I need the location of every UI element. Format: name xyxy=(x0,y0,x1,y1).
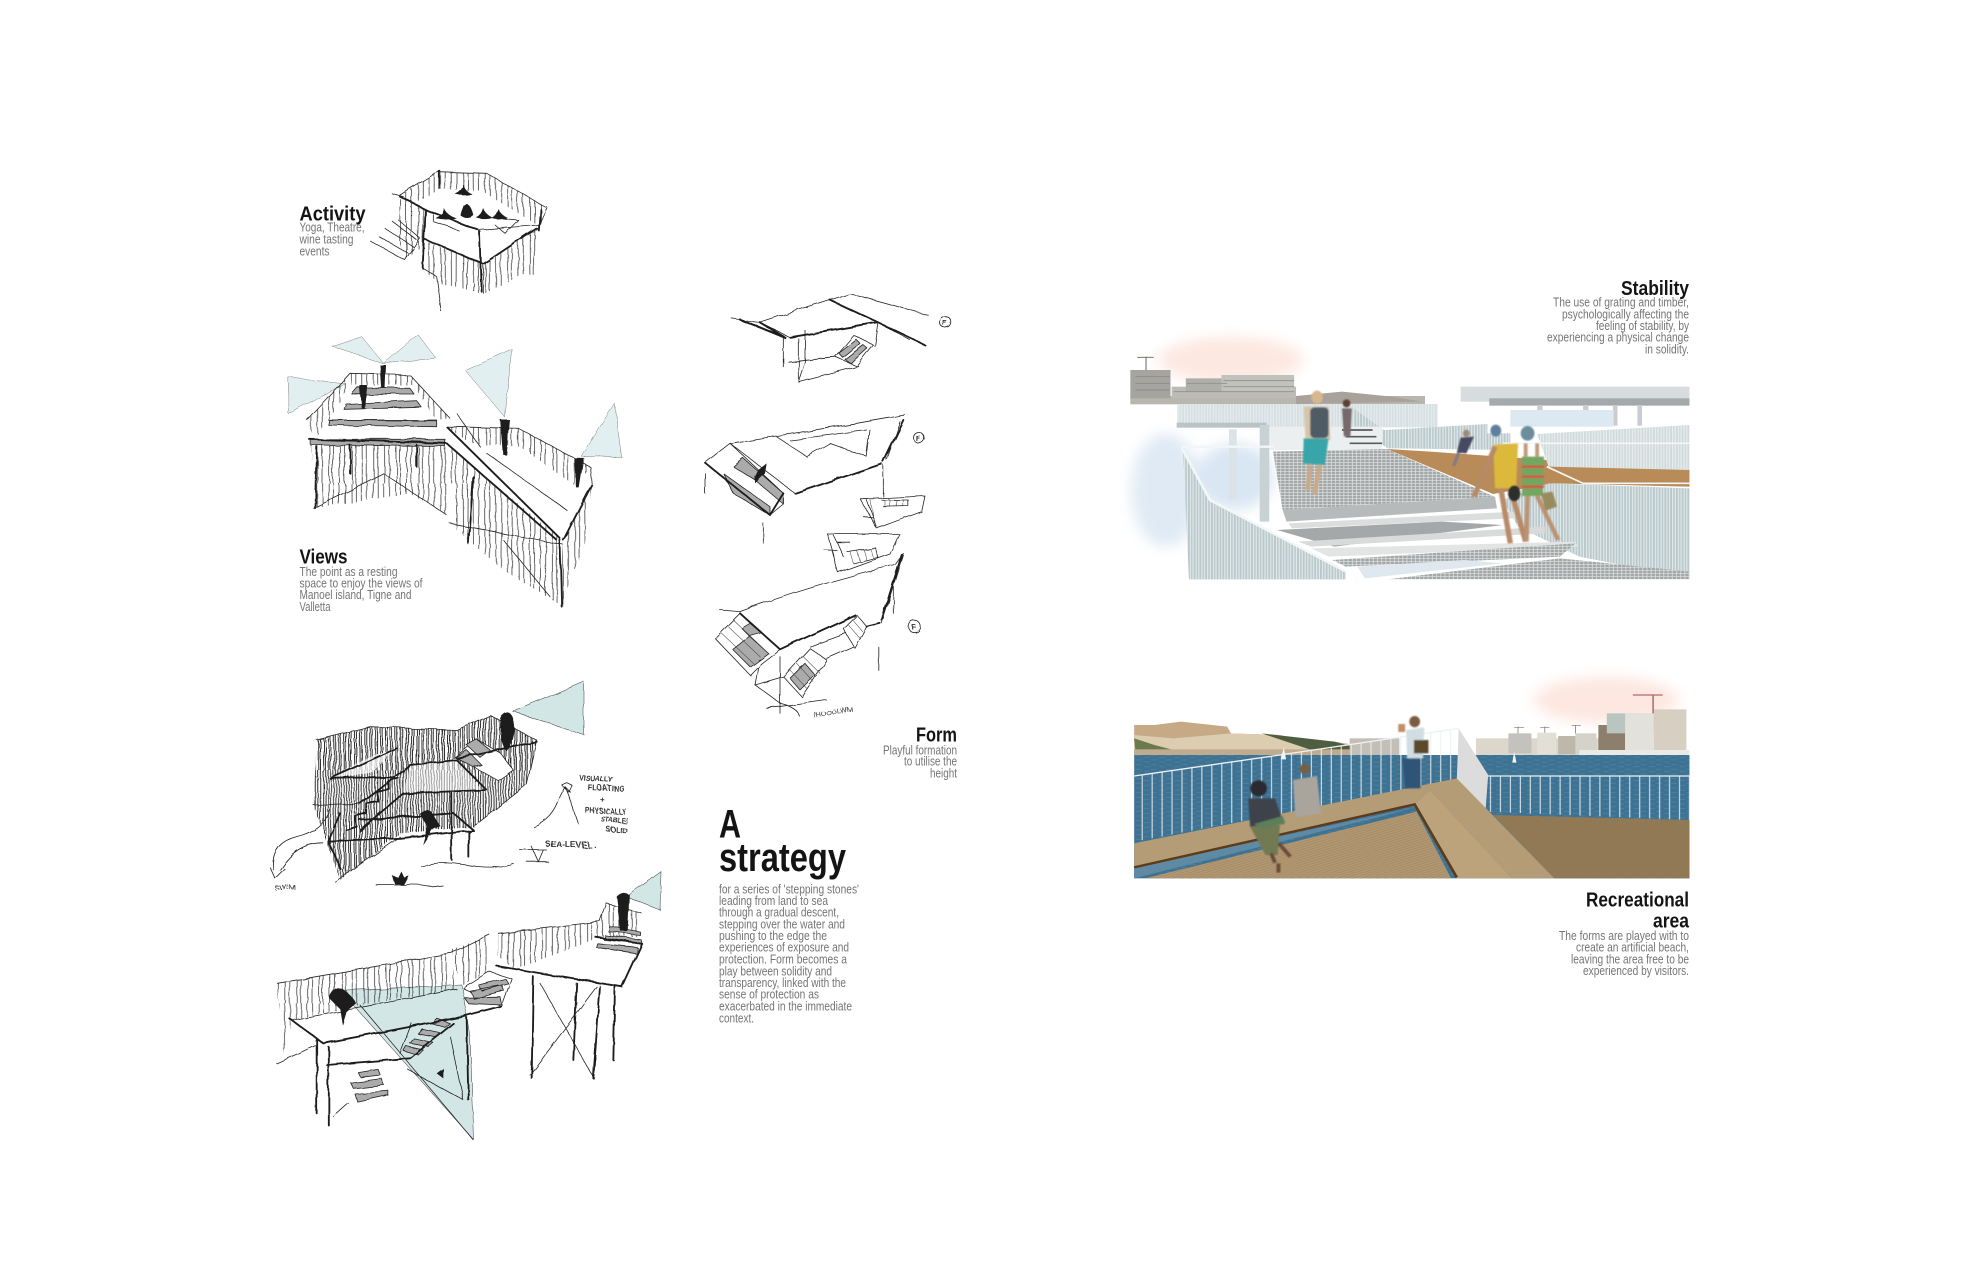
text: activity description: Yoga, Theatre, xyxy=(300,221,364,235)
pale water and back railings xyxy=(1177,404,1614,522)
people xyxy=(1248,716,1428,873)
sketch: stepped decks on stilts xyxy=(277,872,661,1140)
heading: Recreational area: Recreational xyxy=(1586,890,1689,912)
text: recreational description: create an artificial beach, xyxy=(1576,941,1689,955)
text: views description: The point as a resting xyxy=(300,565,398,579)
text: strategy description: for a series of 'stepping stones' xyxy=(719,882,859,896)
text: strategy description: through a gradual descent, xyxy=(719,906,839,920)
skyline xyxy=(1130,357,1689,426)
heading: Recreational area: area xyxy=(1653,911,1690,933)
text: activity description: wine tasting xyxy=(299,233,354,247)
text: form description: height xyxy=(930,766,957,780)
view cones xyxy=(288,335,622,457)
heading: Form: Form xyxy=(916,725,957,747)
study insets xyxy=(823,496,925,573)
text: strategy description: leading from land to sea xyxy=(719,894,828,908)
annotation: visually floating: + xyxy=(599,795,605,804)
text: stability description xyxy=(1547,296,1690,356)
view cones xyxy=(346,872,661,1140)
text: views description xyxy=(300,565,423,614)
text: stability description: The use of grating and timber, xyxy=(1553,296,1689,310)
text: strategy description: context. xyxy=(719,1011,754,1025)
text: stability description: psychologically affecting the xyxy=(1562,307,1689,321)
figures xyxy=(329,893,629,1078)
annotation: visually floating: VISUALLY xyxy=(579,773,613,784)
annotation: visually floating: FLOATING xyxy=(588,783,625,794)
railings xyxy=(1134,728,1689,842)
skyline: town xyxy=(1476,695,1689,755)
label 3 xyxy=(909,621,921,633)
text: form description: to utilise the xyxy=(904,755,957,769)
sketch: floating platform with stairs xyxy=(270,682,630,892)
sketch: activity platform xyxy=(370,171,547,312)
heading: Recreational area xyxy=(1586,890,1690,933)
grating deck xyxy=(1273,449,1494,510)
stairs xyxy=(351,927,642,1102)
text: recreational description: experienced by visitors. xyxy=(1583,964,1689,978)
heading: Activity: Activity xyxy=(300,204,366,226)
text: strategy description: transparency, linked with the xyxy=(719,976,846,990)
heading: Views: Views xyxy=(300,546,348,568)
heading: A strategy: A xyxy=(719,802,741,846)
label 1: F xyxy=(943,318,948,327)
text: stability description: in solidity. xyxy=(1645,342,1689,356)
text: strategy description: sense of protection as xyxy=(719,988,819,1002)
stairs xyxy=(1277,497,1689,579)
annotation: sea level: SEA-LEVEL . xyxy=(546,840,596,849)
heading: A strategy: strategy xyxy=(719,836,847,880)
image: timber deck render xyxy=(1134,677,1689,878)
figures: yoga group xyxy=(436,184,508,220)
sea xyxy=(1134,755,1689,878)
skyline: fort xyxy=(1134,722,1399,755)
text: strategy description: pushing to the edge the xyxy=(719,929,827,943)
timber deck xyxy=(1387,449,1689,494)
annotation: visually floating: SOLID xyxy=(606,825,628,835)
annotation: visually floating: STABLE/ xyxy=(601,815,628,825)
heading: Stability: Stability xyxy=(1621,278,1690,300)
timber bench and decks xyxy=(1134,778,1689,878)
text: strategy description xyxy=(719,882,859,1025)
study 1 xyxy=(732,293,951,382)
text: strategy description: exacerbated in the immediate xyxy=(719,1000,852,1014)
text: strategy description: experiences of exposure and xyxy=(719,941,849,955)
text: activity description xyxy=(299,221,364,258)
heading: A strategy xyxy=(719,802,847,880)
text: stability description: feeling of stability, by xyxy=(1596,319,1690,333)
image: walkway render xyxy=(1130,337,1689,579)
label 2: F xyxy=(916,434,921,443)
text: recreational description: The forms are played with to xyxy=(1559,929,1689,943)
annotation: hand note: /HOOGLWM xyxy=(813,707,854,719)
text: recreational description: leaving the area free to be xyxy=(1571,952,1689,966)
watercolour wash xyxy=(1533,677,1679,723)
annotation: visually floating xyxy=(576,773,630,835)
text: strategy description: play between solidity and xyxy=(719,964,832,978)
annotation: visually floating: PHYSICALLY xyxy=(585,805,627,817)
text: strategy description: protection. Form becomes a xyxy=(719,952,847,966)
label 3: F xyxy=(912,623,917,632)
left wall xyxy=(1182,447,1346,579)
right fence xyxy=(1503,425,1689,578)
label 1 xyxy=(940,317,951,328)
figures xyxy=(392,713,515,885)
figures on platform xyxy=(359,365,584,488)
text: recreational description xyxy=(1559,929,1689,978)
sketch: form studies xyxy=(705,293,951,719)
study 2 xyxy=(705,415,925,543)
text: stability description: experiencing a physical change xyxy=(1547,331,1689,345)
study 3 xyxy=(715,553,921,719)
people xyxy=(1303,391,1558,543)
sketch: views platform xyxy=(288,335,622,607)
text: views description: Manoel island, Tigne and xyxy=(300,588,412,602)
label 2 xyxy=(914,433,925,444)
text: strategy description: stepping over the water and xyxy=(719,918,845,932)
view cone xyxy=(513,682,584,735)
text: form description: Playful formation xyxy=(883,743,957,757)
annotation: swim: SWIM xyxy=(274,885,296,892)
text: activity description: events xyxy=(300,244,330,258)
watercolour wash xyxy=(1131,337,1304,547)
text: views description: Valletta xyxy=(300,600,330,614)
text: form description xyxy=(883,743,957,780)
text: views description: space to enjoy the views of xyxy=(300,576,423,590)
